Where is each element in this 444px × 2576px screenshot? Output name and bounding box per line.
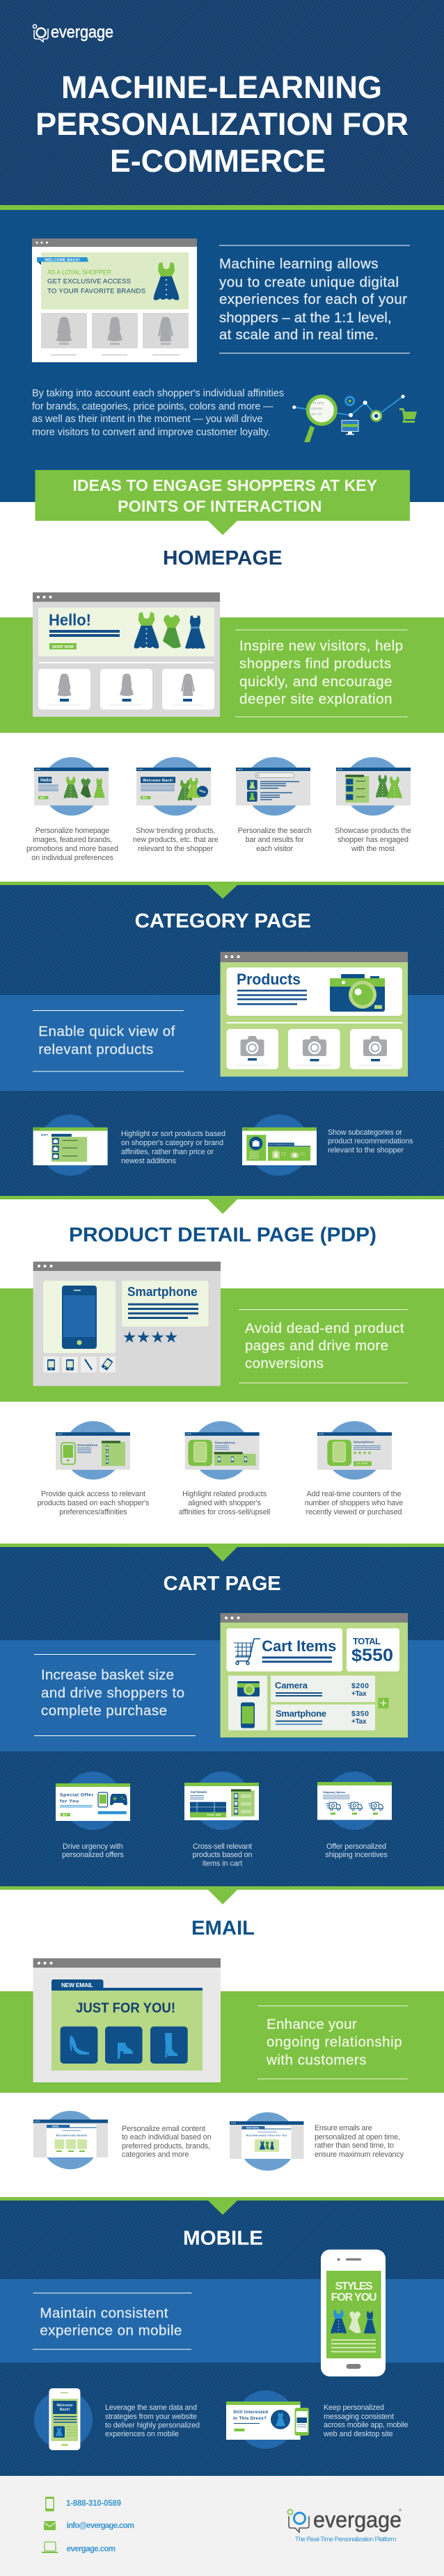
contact: website: evergage.com [67,2545,116,2553]
callout: ongoing relationship [257,2005,408,2079]
tactic: real-time counters: ★ [367,1450,372,1456]
tactic: consistent messaging: across mobile app, mobile [324,2421,409,2429]
browser: just for you email [33,1958,221,2082]
heading: product detail page: PRODUCT DETAIL PAGE (PDP) [69,1224,376,1247]
tactic: trending products: Welcome Back! [143,779,173,783]
tactic: open-time email: personalized at open time, [315,2133,400,2141]
tactic: shipping incentives: Shipping Options [323,1790,345,1794]
browser: welcome back [32,238,197,362]
tactic: same data and strategies: Back! [60,2408,70,2412]
icon: analytics graph with magnifier: 10 1 10 [311,412,322,416]
phone: styles for you: STYLES [335,2281,373,2292]
panel: email section [0,1886,444,2171]
tactic: related products: affinities for cross-sell/upsell [179,1508,270,1516]
heading: homepage: HOMEPAGE [163,547,283,569]
browser: welcome back: GET EXCLUSIVE ACCESS [47,278,131,285]
tactic: urgency offers: personalized offers [62,1851,124,1859]
tactic: personalize homepage [26,757,118,862]
tactic: highlight or sort: Highlight or sort products based [121,1130,225,1138]
callout: quick view [33,1010,184,1072]
browser: hello: Hello! [49,610,91,629]
browser: cart items: $350 [351,1710,369,1718]
browser: cart items: Smartphone [276,1708,326,1719]
tactic: real-time counters: 1.6K VIEWS [356,1462,368,1465]
heading: mobile: MOBILE [183,2228,263,2250]
tactic: quick access: preferences/affinities [59,1508,127,1516]
tactic: open-time email: rather than send time, to [315,2141,394,2150]
tactic: real-time counters: Add real-time counters of the [306,1490,401,1498]
icon: smartphone [62,1286,97,1349]
logo: evergage: evergage [51,23,113,42]
tactic: trending products [133,757,219,853]
browser: cart items: Cart Items [262,1637,336,1655]
tactic: real-time counters: number of shoppers who have [305,1499,403,1507]
tactic: personalize homepage: images, featured brands, [33,836,112,844]
browser: cart items: TOTAL [353,1636,381,1646]
logo: evergage footer: evergage [313,2507,402,2532]
callout: inspire [235,630,408,718]
callout: dead-end [239,1309,408,1384]
icon: rating stars: ★ [136,1328,150,1346]
browser: welcome back: WELCOME BACK! [45,259,80,263]
tactic: consistent messaging: Keep personalized [324,2404,384,2412]
callout: basket size: complete purchase [41,1703,167,1719]
tactic: real-time counters: recently viewed or purchased [306,1508,402,1516]
tactic: related products [179,1421,270,1516]
tactic: showcase products: Showcase products the [335,827,411,835]
heading: cart page: CART PAGE [164,1573,281,1595]
tactic: personalize homepage: promotions and more based [26,845,118,853]
icon: rating stars: ★ [122,1328,136,1346]
callout: ongoing relationship: Enhance your [267,2016,357,2032]
heading: email: EMAIL [191,1918,255,1940]
tactic: subcategories: Show subcategories or [328,1128,402,1137]
icon: analytics graph with magnifier: 10 1010 [312,401,324,405]
icon: analytics graph with magnifier: 1100101 [310,407,323,410]
tactic: urgency offers: BUY [63,1813,68,1816]
tactic: open-time email: ensure maximum relevancy [315,2150,404,2159]
icon: analytics graph with magnifier [292,395,417,442]
title: PERSONALIZATION FOR [35,106,409,142]
browser: welcome back: TO YOUR FAVORITE BRANDS [47,288,145,295]
callout: machine learning [219,245,410,353]
tactic: real-time counters: ★ [363,1450,367,1456]
tactic: same data and strategies: Welcome [56,2404,73,2408]
tactic: urgency offers: Drive urgency with [63,1842,123,1851]
tactic: same data and strategies: strategies from your website [105,2413,197,2421]
tactic: trending products: BUY [143,797,148,800]
text: affinities paragraph: By taking into account each shopper's individual affinities [32,388,284,399]
browser: hello [33,592,220,717]
panel: product detail page section [0,1196,444,1516]
logo: evergage footer [287,2507,402,2543]
tactic: consistent messaging: Still Interested [233,2410,268,2415]
panel: ideas banner [35,470,410,535]
browser: just for you email: JUST FOR YOU! [76,2000,175,2016]
panel: homepage band [0,592,444,733]
icon: envelope [44,2521,56,2530]
panel: header band [0,0,444,210]
contact: phone number: 1-888-310-0589 [66,2500,121,2508]
callout: inspire: shoppers find products [239,656,391,672]
callout: dead-end: Avoid dead-end product [245,1320,404,1336]
tactic: real-time counters [305,1421,403,1516]
panel: ideas banner: IDEAS TO ENGAGE SHOPPERS AT KEY [72,476,377,494]
tactic: open-time email: Recommended Video For You [246,2134,287,2137]
callout: inspire: quickly, and encourage [239,674,393,690]
logo: evergage footer: The Real-Time Personalization Platform [295,2536,397,2543]
panel: homepage tactics [26,757,411,862]
icon: laptop [42,2542,58,2553]
tactic: quick access: Smartphone [77,1443,98,1447]
browser: cart items: +Tax [351,1718,367,1726]
tactic: highlight or sort: SORT [41,1133,49,1136]
callout: dead-end: conversions [245,1356,324,1371]
callout: machine learning: Machine learning allows [219,256,379,272]
tactic: cross-sell: products based on [192,1851,252,1859]
tactic: subcategories: relevant to the shopper [328,1147,404,1155]
tactic: cross-sell: TOTAL: $550 [207,1813,221,1816]
browser: products: Products [237,971,301,988]
icon: small camera [237,1681,260,1696]
tactic: showcase products [335,757,411,853]
icon: small phone [241,1702,255,1728]
tactic: related products: Highlight related products [182,1490,267,1498]
tactic: showcase products: with the most [351,845,395,853]
browser: smartphone [33,1261,221,1386]
browser: hello: SHOP NOW [52,645,74,649]
icon: shopping cart [234,1639,260,1664]
tactic: urgency offers: Special Offer [60,1792,93,1797]
browser: cart items: Camera [275,1680,308,1691]
tactic: subcategories: RECOMMENDED [269,1143,293,1146]
tactic: trending products: NEW! [198,789,206,794]
tactic: personalize homepage: Personalize homepage [35,827,109,835]
contact: email: info@evergage.com [67,2522,134,2530]
icon: rating stars [122,1328,178,1346]
tactic: real-time counters: Smartphone [354,1441,374,1444]
text: affinities paragraph [32,388,284,438]
tactic: subcategories: product recommendations [328,1137,413,1146]
callout: machine learning: experiences for each of your [219,291,407,307]
tactic: cross-sell [184,1772,259,1868]
tactic: personalize search: Personalize the search [238,827,312,835]
callout: quick view: relevant products [38,1042,153,1058]
tactic: consistent messaging [226,2390,409,2449]
callout: ongoing relationship: with customers [266,2052,366,2068]
tactic: personalize homepage: on individual preferences [31,854,113,862]
text: affinities paragraph: as well as their intent in the moment — you will drive [32,414,263,425]
tactic: highlight or sort [33,1115,225,1176]
panel: cart page section [0,1544,444,1886]
tactic: personalize email content [33,2111,212,2169]
callout: machine learning: shoppers – at the 1:1 level, [219,310,392,325]
browser: cart items: $200 [351,1682,369,1690]
panel: footer [0,2476,444,2576]
tactic: highlight or sort: affinities, rather than price or [121,1148,214,1156]
browser: smartphone: Smartphone [127,1285,198,1299]
tactic: real-time counters: ★ [353,1450,358,1456]
callout: basket size: Increase basket size [41,1667,174,1683]
tactic: subcategories [242,1115,413,1176]
callout: dead-end: pages and drive more [245,1338,388,1354]
tactic: cross-sell: Cart Details [191,1790,207,1794]
tactic: same data and strategies: to deliver highly personalized [105,2422,200,2430]
browser: cart items: $550 [351,1646,393,1665]
tactic: consistent messaging: messaging consistent [324,2413,394,2421]
tactic: trending products: relevant to the shopper [138,845,214,853]
tactic: personalize email content: Personalize email content [122,2125,205,2133]
tactic: consistent messaging: in This Dress? [233,2416,267,2421]
heading: category page: CATEGORY PAGE [135,910,311,932]
tactic: personalize search: each visitor [256,845,293,853]
tactic: personalize homepage: BUY [40,797,46,800]
tactic: shipping incentives [317,1772,392,1859]
panel: ideas banner: POINTS OF INTERACTION [118,497,322,515]
tactic: personalize search [236,757,312,853]
tactic: highlight or sort: newest additions [121,1157,177,1165]
tactic: cross-sell: items in cart [203,1860,242,1868]
browser: welcome back: AS A LOYAL SHOPPER [47,269,111,276]
tactic: open-time email: NEW EMAIL [246,2126,260,2129]
text: affinities paragraph: more visitors to convert and improve customer loyalty. [32,427,270,438]
browser: cart items [220,1613,408,1737]
tactic: personalize email content: Recommended Brands [56,2134,87,2137]
panel: introduction [0,210,444,502]
icon: phone [45,2497,54,2511]
panel: mobile section [0,2197,444,2476]
tactic: urgency offers: for You [60,1799,79,1804]
browser: just for you email: NEW EMAIL [61,1982,93,1988]
callout: basket size: and drive shoppers to [41,1685,184,1701]
text: affinities paragraph: for brands, categories, price points, colors and more — [32,401,273,412]
callout: consistent experience: Maintain consistent [40,2305,168,2321]
tactic: related products: aligned with shopper's [188,1499,261,1507]
callout: machine learning: at scale and in real time. [219,327,379,343]
tactic: highlight or sort: on shopper's category or brand [121,1139,223,1147]
tactic: open-time email: Ensure emails are [315,2124,372,2132]
callout: inspire: deeper site exploration [239,691,393,707]
tactic: trending products: Show trending products, [136,827,215,835]
tactic: personalize email content: to each individual based on [122,2133,212,2141]
tactic: personalize email content: EMAIL [52,2125,59,2128]
phone: styles for you: FOR YOU [331,2292,377,2303]
tactic: open-time email [230,2112,404,2171]
browser: cart items: +Tax [351,1690,367,1698]
tactic: real-time counters: ★ [358,1450,363,1456]
callout: ongoing relationship: ongoing relationship [267,2034,402,2050]
callout: consistent experience: experience on mobile [40,2322,182,2339]
tactic: urgency offers [56,1772,130,1859]
tactic: showcase products: shopper has engaged [338,836,409,844]
icon: camera [330,974,385,1012]
icon: tall boot [165,2033,177,2057]
tactic: quick access: products based on each shopper's [38,1499,150,1507]
title: MACHINE-LEARNING [61,70,382,105]
icon: rating stars: ★ [164,1328,178,1346]
title: E-COMMERCE [110,143,326,179]
icon: high heel [70,2035,89,2055]
callout: quick view: Enable quick view of [38,1023,175,1039]
tactic: personalize email content: categories and more [122,2150,189,2159]
browser: products [220,952,408,1076]
tactic: trending products: new products, etc. that are [133,836,219,844]
icon: ankle boot [118,2043,133,2059]
tactic: personalize homepage: Hello! [40,778,53,783]
tactic: same data and strategies: Leverage the same data and [105,2404,197,2412]
tactic: consistent messaging: web and desktop site [323,2430,393,2438]
callout: basket size [34,1654,196,1736]
tactic: quick access: Provide quick access to relevant [41,1490,145,1498]
tactic: personalize search: bar and results for [246,836,304,844]
tactic: related products: Smartphone [215,1441,235,1445]
tactic: shipping incentives: shipping incentives [325,1851,388,1859]
tactic: cross-sell: Cross-sell relevant [193,1842,252,1851]
panel: category page section [0,882,444,1196]
tactic: same data and strategies [34,2388,200,2450]
tactic: same data and strategies: experiences on mobile [105,2430,179,2438]
phone: styles for you [321,2250,386,2376]
title [35,70,409,179]
tactic: personalize email content: preferred products, brands, [122,2142,210,2150]
callout: consistent experience [33,2293,192,2350]
tactic: shipping incentives: Offer personalized [326,1842,386,1851]
callout: inspire: Inspire new visitors, help [239,638,403,654]
callout: machine learning: you to create unique digital [219,274,399,291]
tactic: quick access [38,1421,150,1516]
icon: rating stars: ★ [150,1328,165,1346]
